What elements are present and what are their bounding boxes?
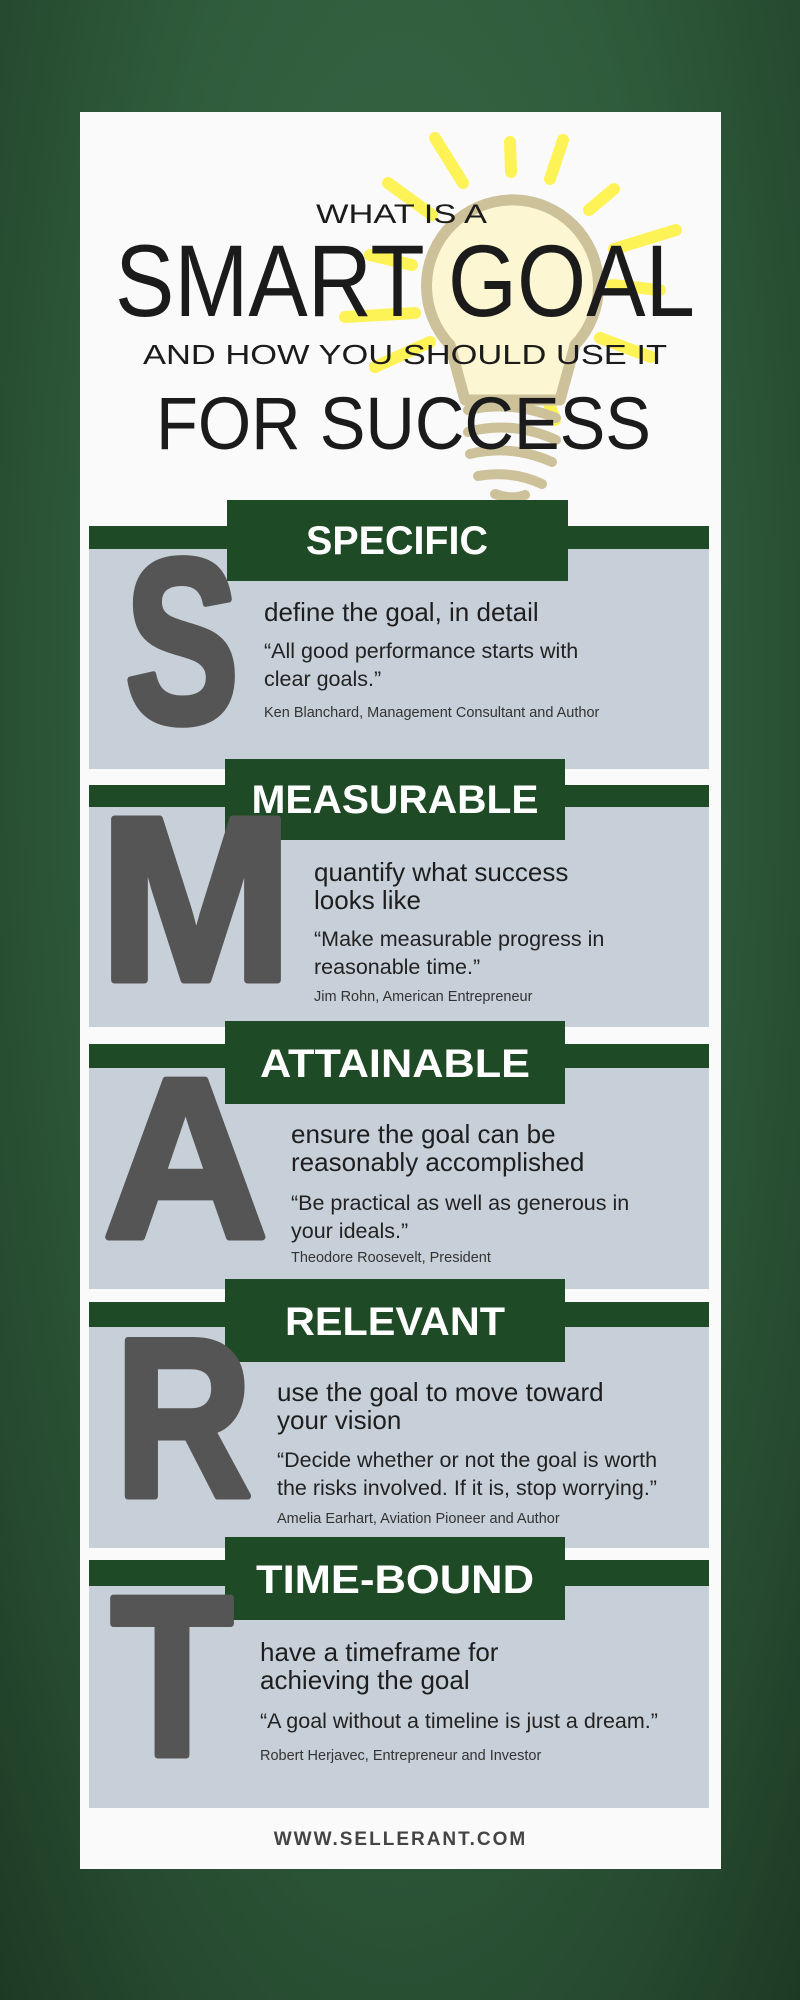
panel: time-bound: achieving the goal: [260, 1665, 470, 1695]
panel: specific: S: [125, 510, 239, 770]
panel: attainable: ATTAINABLE: [260, 1042, 530, 1086]
panel: specific: Ken Blanchard, Management Consultant and Author: [264, 705, 599, 721]
panel: attainable: A: [103, 1032, 268, 1286]
panel: specific: “All good performance starts with: [264, 639, 578, 663]
panel: attainable: [89, 1021, 709, 1289]
panel: attainable: ensure the goal can be: [291, 1119, 556, 1149]
icon: light bulb: [345, 138, 676, 497]
panel: measurable: M: [99, 768, 293, 1028]
title with bulb: [115, 132, 695, 500]
panel: measurable: looks like: [314, 885, 421, 915]
title text: WHAT IS A: [316, 199, 487, 229]
panel: time-bound: T: [111, 1550, 233, 1804]
panel: attainable: “Be practical as well as generous in: [291, 1191, 629, 1215]
panel: specific: define the goal, in detail: [264, 597, 539, 627]
panel: measurable: “Make measurable progress in: [314, 927, 604, 951]
panel: measurable: MEASURABLE: [252, 778, 539, 822]
footer url: WWW.SELLERANT.COM: [274, 1829, 527, 1850]
panel: time-bound: Robert Herjavec, Entrepreneur and Investor: [260, 1748, 541, 1764]
panel: relevant: Amelia Earhart, Aviation Pioneer and Author: [277, 1511, 560, 1527]
title text: AND HOW YOU SHOULD USE IT: [143, 339, 667, 370]
panel: measurable: quantify what success: [314, 857, 568, 887]
panel: specific: [89, 500, 709, 770]
panel: measurable: [89, 759, 709, 1028]
panel: relevant: the risks involved. If it is, stop worrying.”: [277, 1476, 657, 1500]
title text: [115, 199, 695, 465]
panel: attainable: reasonably accomplished: [291, 1147, 584, 1177]
panel: specific: SPECIFIC: [306, 519, 488, 563]
card: [80, 112, 721, 1869]
panel: relevant: RELEVANT: [285, 1300, 505, 1344]
panel: relevant: R: [115, 1291, 252, 1544]
panel: measurable: reasonable time.”: [314, 955, 480, 979]
panel: time-bound: “A goal without a timeline is just a dream.”: [260, 1709, 658, 1733]
title text: FOR SUCCESS: [156, 382, 651, 465]
panel: relevant: your vision: [277, 1405, 401, 1435]
panel: relevant: [89, 1279, 709, 1548]
panel: time-bound: TIME-BOUND: [256, 1558, 534, 1602]
panel: relevant: “Decide whether or not the goal is worth: [277, 1448, 657, 1472]
panel: attainable: Theodore Roosevelt, President: [291, 1250, 491, 1266]
panel: relevant: use the goal to move toward: [277, 1377, 604, 1407]
panel: attainable: your ideals.”: [291, 1219, 408, 1243]
title text: SMART GOAL: [115, 224, 695, 338]
panel: measurable: Jim Rohn, American Entrepreneur: [314, 989, 532, 1005]
panel: time-bound: have a timeframe for: [260, 1637, 498, 1667]
panel: time-bound: [89, 1537, 709, 1808]
panel: specific: clear goals.”: [264, 667, 381, 691]
